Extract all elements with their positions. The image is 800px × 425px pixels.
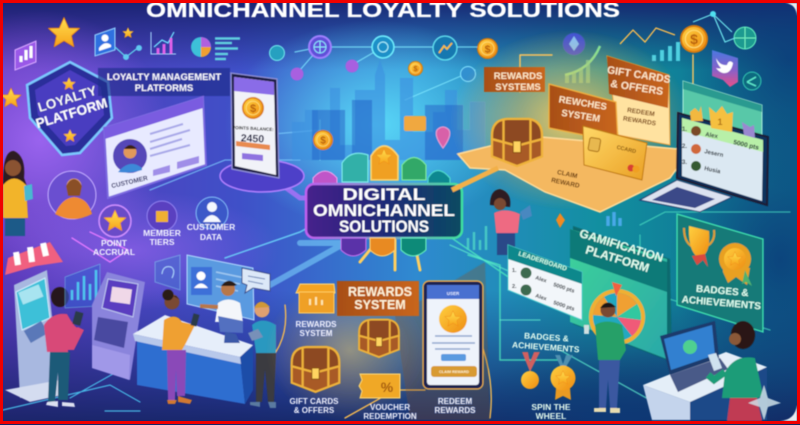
leaderboard rows: Husia [704,166,721,175]
leaderboard rows: Alex [705,132,719,140]
leaderboard: 5000 pts [552,300,575,313]
icon: map pin [436,127,450,148]
gift card label: GIFT CARDS [290,397,339,406]
redeem label: REDEEM [438,397,472,406]
network icons [270,11,761,90]
claim reward button: CLAIM REWARD [439,370,469,374]
label: Loyalty Management Platforms: LOYALTY MANAGEMENT [107,72,221,83]
icon: small star [123,28,133,38]
icon: bars [654,42,678,61]
leaderboard: LEADERBOARD [517,250,568,273]
leaderboard rows [682,126,760,175]
person: man with phone at kiosk [44,287,84,407]
person: man with tablet [248,302,276,408]
band: rewards system: SYSTEM [354,298,406,312]
person: man by wheel [584,302,626,413]
customer buttons [153,156,199,176]
rewards box label: REWARDS [296,320,337,329]
voucher label [363,403,417,421]
icon: globe node [309,36,331,58]
icon: pie chart and bars [191,37,240,59]
phone button [242,153,263,161]
text: badges: BADGES & [696,284,749,299]
redeem label: REWARDS [435,406,476,415]
person: woman with phone [708,321,763,421]
node: customer data [187,197,235,242]
customer data label [187,222,235,242]
shop chart [468,226,486,250]
redeem label [435,397,476,415]
member tiers label [143,228,181,247]
node: member tiers [143,201,181,247]
icon: teal bars [608,212,620,226]
icon: sparkle [748,385,781,420]
icon: chest lower [292,347,339,392]
person: woman with tablet [3,151,33,236]
label: spin the wheel: SPIN THE [531,402,571,412]
customer data label: DATA [200,232,222,242]
icon: percent voucher [359,374,400,398]
icon: star left edge [1,88,21,107]
panel: gamification platform: GAMIFICATION [578,226,665,265]
redeem rewards text: REWARDS [622,115,657,128]
city skyline [292,60,485,160]
icon: camera node [460,66,476,82]
icon: line chart [151,32,176,54]
leaderboard: 2. [512,284,517,290]
rewards box label [296,320,337,338]
laptop keyboard [640,180,732,212]
icon: rosette medal [719,243,752,286]
leaderboard: 5000 pts [552,282,575,295]
central panel: Digital Omnichannel Solutions [306,146,462,256]
icon: twitter tile [712,50,738,87]
text: badges: ACHIEVEMENTS [681,295,762,312]
gift card label: & OFFERS [294,406,335,415]
icon: medals [521,352,576,400]
spin wheel [589,282,645,345]
balance text: 2450 [240,132,265,146]
centre title: SOLUTIONS [339,217,429,236]
leaderboard: Alex [534,293,548,303]
label: Loyalty Management Platforms: PLATFORMS [135,83,193,94]
chest [492,119,542,166]
leaderboard rows: 5000 pts [733,139,760,152]
panel: rewches system: SYSTEM [561,108,601,125]
panel: rewards platform [450,30,690,212]
leaderboard rows: Jesern [704,149,724,159]
panel: cloud icon backdrop [155,255,180,290]
voucher label: REDEMPTION [363,412,417,421]
avatar: man [48,171,96,219]
icon: orange box [404,116,426,131]
badge: Loyalty Platform [27,62,112,155]
member tiers label: MEMBER [143,228,181,238]
label: rewards systems: SYSTEMS [495,82,541,93]
icon: trend node [433,36,457,60]
icon: ethereum token [563,33,585,55]
panel: laptop leaderboard [640,81,768,212]
icon: share node [743,72,761,90]
leaderboard rows: 1. [682,127,687,133]
member tiers label: TIERS [149,237,175,247]
person: woman at laptop middle [490,189,532,255]
text: badges [681,283,763,312]
icon: coin in skyline [313,130,333,150]
laptop [660,321,728,392]
customer data label: CUSTOMER [187,222,235,232]
icon: chart line on rewards [565,28,675,83]
panel: gamification platform [570,226,672,362]
leaderboard rows: 3. [682,160,687,166]
kiosk left with awning [5,242,63,402]
point accrual label [93,238,135,257]
icon: network node [270,46,284,60]
point accrual label: POINT [101,238,128,248]
centre title: OMNICHANNEL [313,201,455,220]
icon: badge stars [63,78,76,142]
panel: gamification platform: PLATFORM [584,243,651,275]
balance text [231,125,274,146]
band: rewards system: REWARDS [348,285,412,299]
icon: large coin [680,25,708,53]
gold card: CCARD [616,145,637,155]
leaderboard: 1. [512,268,517,274]
icon: bottom-right corner [780,405,797,421]
icon: profile tile [95,28,142,60]
icon: gear node [372,36,394,58]
desk with laptop [643,321,767,420]
icon: pink coin nodes [290,60,358,80]
label: rewards systems: REWARDS [494,71,542,82]
band: rewards system [337,281,419,316]
panel: rewards system bottom [265,262,490,422]
panel: gift cards and offers: & OFFERS [610,78,664,98]
panel: rewches system [549,84,618,142]
icon tabs above panel [313,146,450,190]
person: staff [200,281,243,322]
avatar: customer [113,139,147,173]
icon: globe [693,11,756,49]
badge text: PLATFORM [34,95,109,131]
person: woman at counter [162,290,199,404]
label: spin the wheel: WHEEL [536,411,566,421]
icon: bar chart tile [15,41,36,70]
label: rewards systems [484,67,545,93]
badge text [30,81,109,131]
leaderboard rows: 2. [682,144,687,150]
centre title [313,185,455,236]
icon tabs below panel [341,238,426,256]
icon: percent voucher: % [381,379,394,395]
claim reward text: CLAIM [556,169,578,180]
customer label: CUSTOMER [111,175,149,190]
progress bar [236,141,270,150]
panel: rewches system: REWCHES [558,94,608,113]
panel: customer window [104,97,206,198]
balance text: POINTS BALANCE: [232,125,274,132]
icon: rewards box [296,284,335,313]
chart backdrop [65,264,100,308]
point accrual label: ACCRUAL [93,247,135,257]
centre title: DIGITAL [342,185,426,204]
phone: claim reward: USER [447,291,460,296]
label: badges and achievements [512,330,581,354]
redeem rewards text: REDEEM [627,107,655,118]
node: point accrual [93,205,135,257]
gold card [583,126,647,180]
claim reward text: REWARD [550,177,580,190]
icon: orange gem [556,213,565,228]
voucher label: VOUCHER [370,403,410,412]
leaderboard [508,245,582,320]
icon: trophy [684,226,714,267]
panel: gift cards and offers [604,56,671,145]
icon: star coin [439,305,467,333]
icon: speech bubble [242,268,270,293]
icon: chest upper [359,320,399,357]
phone: claim reward [423,281,483,389]
phone: points balance [220,73,304,192]
label: badges and achievements: BADGES & [524,330,569,344]
label: spin the wheel [531,402,571,421]
kiosk centre [92,272,145,380]
rewards box label: SYSTEM [300,329,333,338]
icon: large star [49,18,79,47]
icon: top-right corner [785,3,797,16]
label: Loyalty Management Platforms [98,68,230,96]
panel: profile screen [187,255,254,320]
counter monitor [218,316,243,343]
icon: small coins [408,38,498,76]
leaderboard: Alex [534,275,548,285]
panel: gift cards and offers: GIFT CARDS [606,64,671,86]
label: badges and achievements: ACHIEVEMENTS [512,340,580,354]
counter [133,315,253,404]
badge text: LOYALTY [36,83,98,115]
icon: coin [242,97,264,119]
claim reward text [550,168,582,190]
redeem rewards text [622,107,658,128]
gift card label [290,397,339,415]
panel: badges and achievements [677,214,763,332]
icon: crowns: 1 [717,117,723,127]
